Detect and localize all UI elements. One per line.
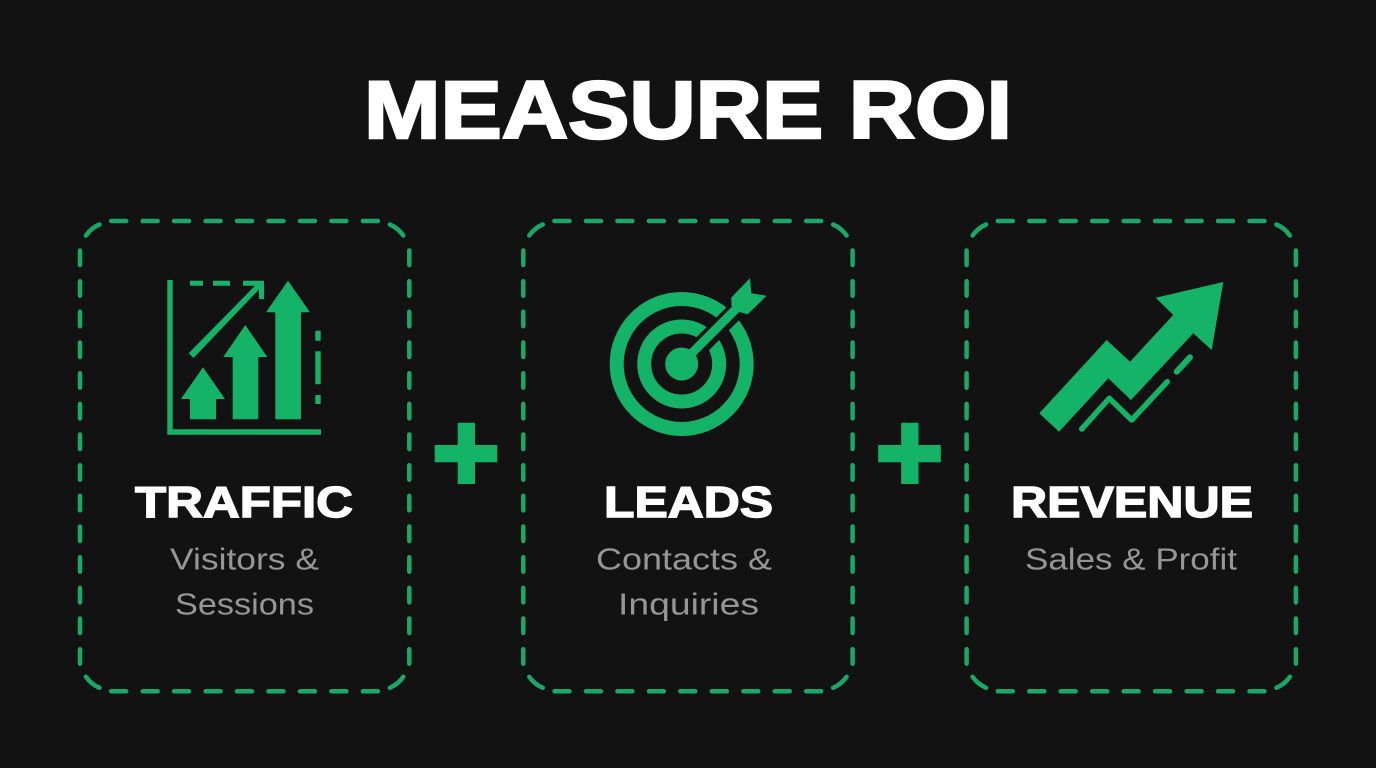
title: MEASURE ROI	[364, 65, 1012, 156]
text: sales and profit: Sales & Profit	[1025, 542, 1237, 576]
label: revenue: REVENUE	[1011, 478, 1253, 527]
panel border: revenue	[967, 221, 1296, 691]
text: contacts and inquiries: Contacts &	[596, 542, 772, 576]
plus: traffic and leads	[435, 423, 497, 484]
panel border: leads	[523, 221, 853, 691]
panel: leads	[523, 221, 853, 691]
icon: target with arrow	[617, 278, 767, 429]
label: leads: LEADS	[604, 478, 773, 527]
panel: traffic	[80, 221, 409, 691]
plus: leads and revenue	[878, 423, 941, 484]
text: visitors and sessions: Sessions	[175, 586, 314, 622]
icon: zigzag growth arrow	[1039, 282, 1223, 432]
text: contacts and inquiries	[596, 542, 772, 622]
text: visitors and sessions	[170, 542, 319, 622]
text: visitors and sessions: Visitors &	[170, 542, 319, 576]
panel: revenue	[967, 221, 1296, 691]
icon: rising bar arrows chart	[167, 280, 321, 435]
text: contacts and inquiries: Inquiries	[618, 586, 759, 622]
panel border: traffic	[80, 221, 409, 691]
label: traffic: TRAFFIC	[135, 478, 353, 527]
